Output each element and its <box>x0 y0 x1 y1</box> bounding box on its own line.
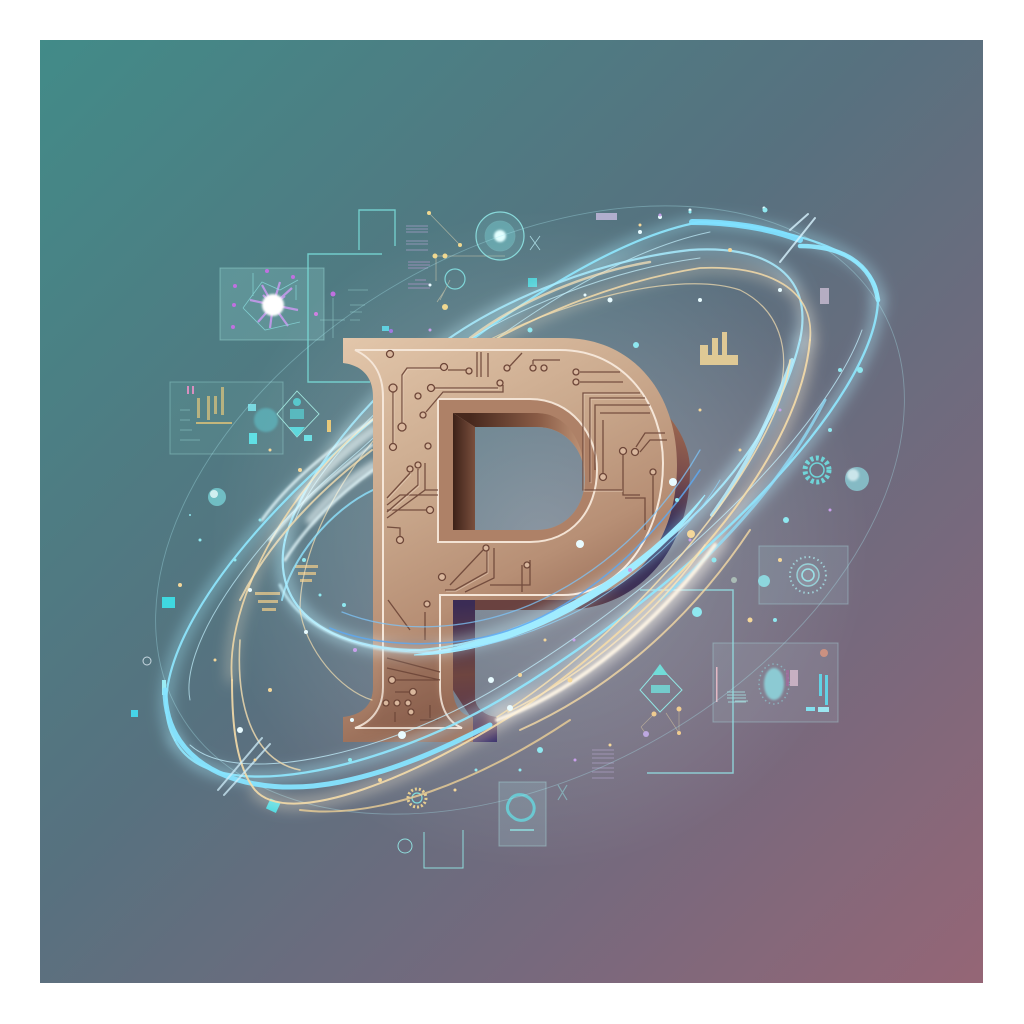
thin outer ellipse <box>48 81 1012 939</box>
panel: purple burst hologram <box>220 268 368 340</box>
P inset outline <box>355 350 663 728</box>
back orbit: blue outer strand <box>189 232 710 700</box>
back orbit glow <box>166 222 878 740</box>
icon: node network top <box>427 211 505 310</box>
back orbit: blue inner strand <box>295 258 700 520</box>
icon: diamond left <box>277 391 331 441</box>
back orbit: bright left streaks <box>300 430 374 520</box>
panel: bar chart hologram <box>170 382 283 454</box>
icon: target circle <box>476 212 540 260</box>
frame lines top left <box>308 210 395 382</box>
front orbit: blue inner <box>283 340 800 650</box>
P extrusion: bowl <box>453 388 690 610</box>
P face <box>343 338 677 742</box>
left markers <box>131 597 281 813</box>
gold data bars left <box>255 565 318 611</box>
back orbit: gold <box>231 268 810 680</box>
icon: sphere left <box>208 488 226 506</box>
letter P <box>343 338 690 742</box>
back orbit: blue outer <box>166 222 878 740</box>
front orbit glow <box>175 300 878 804</box>
icon: sphere right <box>845 467 869 491</box>
panel: data dots hologram <box>713 643 838 722</box>
front orbit: gold <box>232 340 810 804</box>
panel: rings hologram <box>759 546 848 604</box>
back orbit: thick top arc <box>692 222 800 240</box>
back orbit: blue inner <box>285 249 802 540</box>
sparkle particles <box>178 206 863 792</box>
front orbit: blue thick lower <box>165 690 490 787</box>
back orbit: gold inner <box>300 284 784 610</box>
text blocks: small data glyph rows <box>406 226 430 288</box>
front orbits <box>165 300 878 812</box>
frame lines bottom right <box>640 590 733 773</box>
front orbit: blue outer <box>175 300 878 777</box>
circuit highlight <box>388 369 646 591</box>
front orbit: blue outer strand <box>190 330 862 764</box>
icon: gold bar chart <box>700 332 738 365</box>
front orbit: blue right band <box>712 360 792 515</box>
P lower shade <box>358 640 462 728</box>
icon: gear right <box>805 458 829 482</box>
circuit traces <box>387 352 667 722</box>
back orbits <box>48 81 1012 939</box>
panel: bottom icon card <box>499 782 546 846</box>
text blocks: lower data rows <box>558 750 614 800</box>
P extrusion: stem <box>453 596 497 742</box>
icon: top small squares <box>382 213 829 333</box>
icon: diamond right <box>640 664 682 737</box>
P counter bevel <box>438 399 597 542</box>
circuit pads <box>383 350 656 715</box>
front orbit: bright crescent <box>414 495 705 655</box>
icon: sphere lower right <box>731 575 770 587</box>
icon: circle and bracket <box>398 830 463 868</box>
icon: gear bottom <box>408 789 426 807</box>
